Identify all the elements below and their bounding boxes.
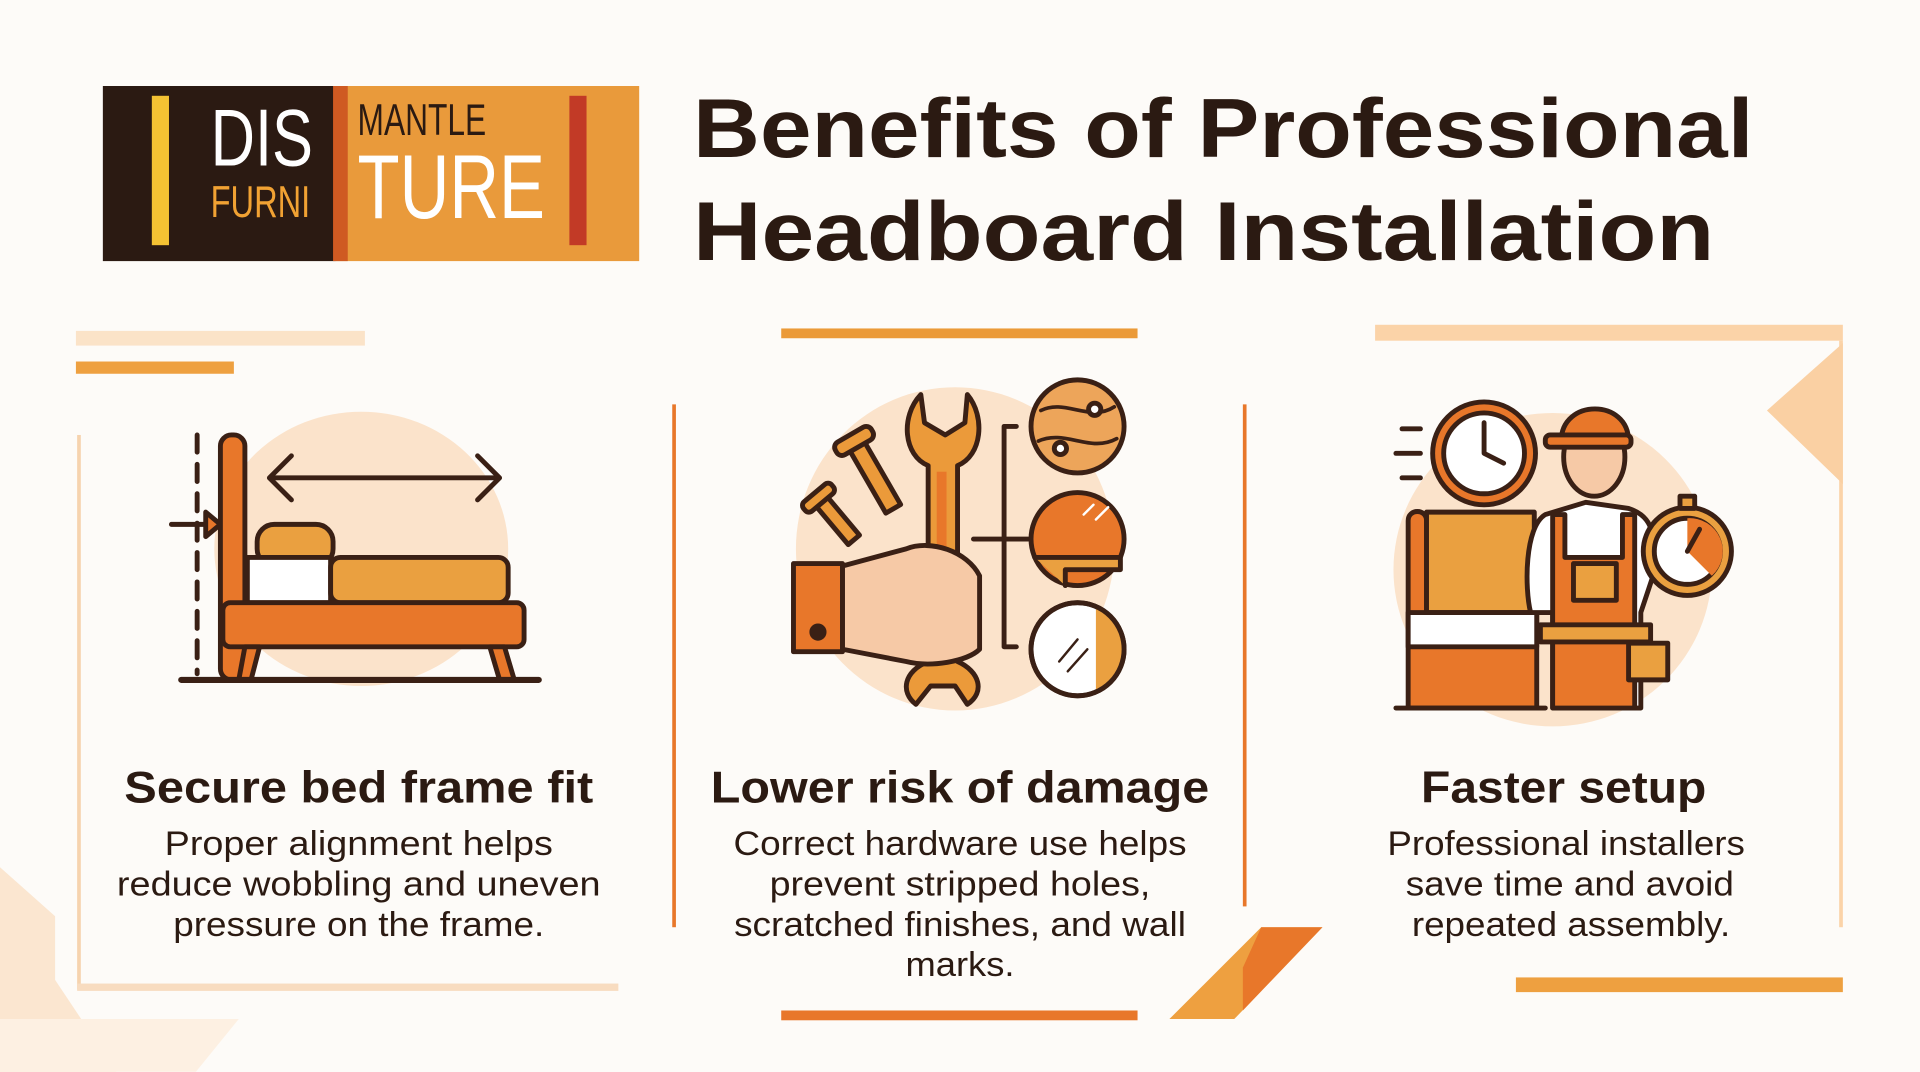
- panel 3 text: Faster setup: [1421, 763, 1706, 812]
- logo: DIS: [211, 94, 313, 184]
- panel 2 text: prevent stripped holes,: [770, 865, 1150, 903]
- title: [693, 82, 1753, 278]
- logo: [103, 86, 639, 261]
- panel 1 text: Secure bed frame fit: [124, 763, 594, 812]
- logo: FURNI: [211, 178, 310, 227]
- panel 2 text: Correct hardware use helps: [733, 825, 1187, 863]
- icon: wrench, hand, surfaces: [793, 380, 1124, 710]
- title: Benefits of Professional: [693, 82, 1753, 175]
- panel 2 text: [711, 763, 1209, 984]
- panel 2 text: marks.: [906, 946, 1014, 984]
- decorative corner shapes: [0, 867, 239, 1072]
- panel frames: [76, 325, 1843, 1020]
- panel 3 text: save time and avoid: [1406, 865, 1734, 903]
- logo: TURE: [358, 137, 545, 239]
- panel 3 text: Professional installers: [1387, 825, 1745, 863]
- panel 1 text: Proper alignment helps: [165, 825, 553, 863]
- panel 2 text: scratched finishes, and wall: [734, 906, 1186, 944]
- panel 1 text: pressure on the frame.: [173, 906, 544, 944]
- icon: bed frame: [171, 412, 539, 686]
- panel 2 text: Lower risk of damage: [711, 763, 1209, 812]
- panel 3 text: repeated assembly.: [1412, 906, 1730, 944]
- panel 1 text: [117, 763, 601, 944]
- logo: MANTLE: [358, 96, 486, 145]
- panel 1 text: reduce wobbling and uneven: [117, 865, 601, 903]
- title: Headboard Installation: [693, 185, 1714, 278]
- icon: clock, installer, stopwatch: [1393, 402, 1731, 726]
- panel 3 text: [1387, 763, 1745, 944]
